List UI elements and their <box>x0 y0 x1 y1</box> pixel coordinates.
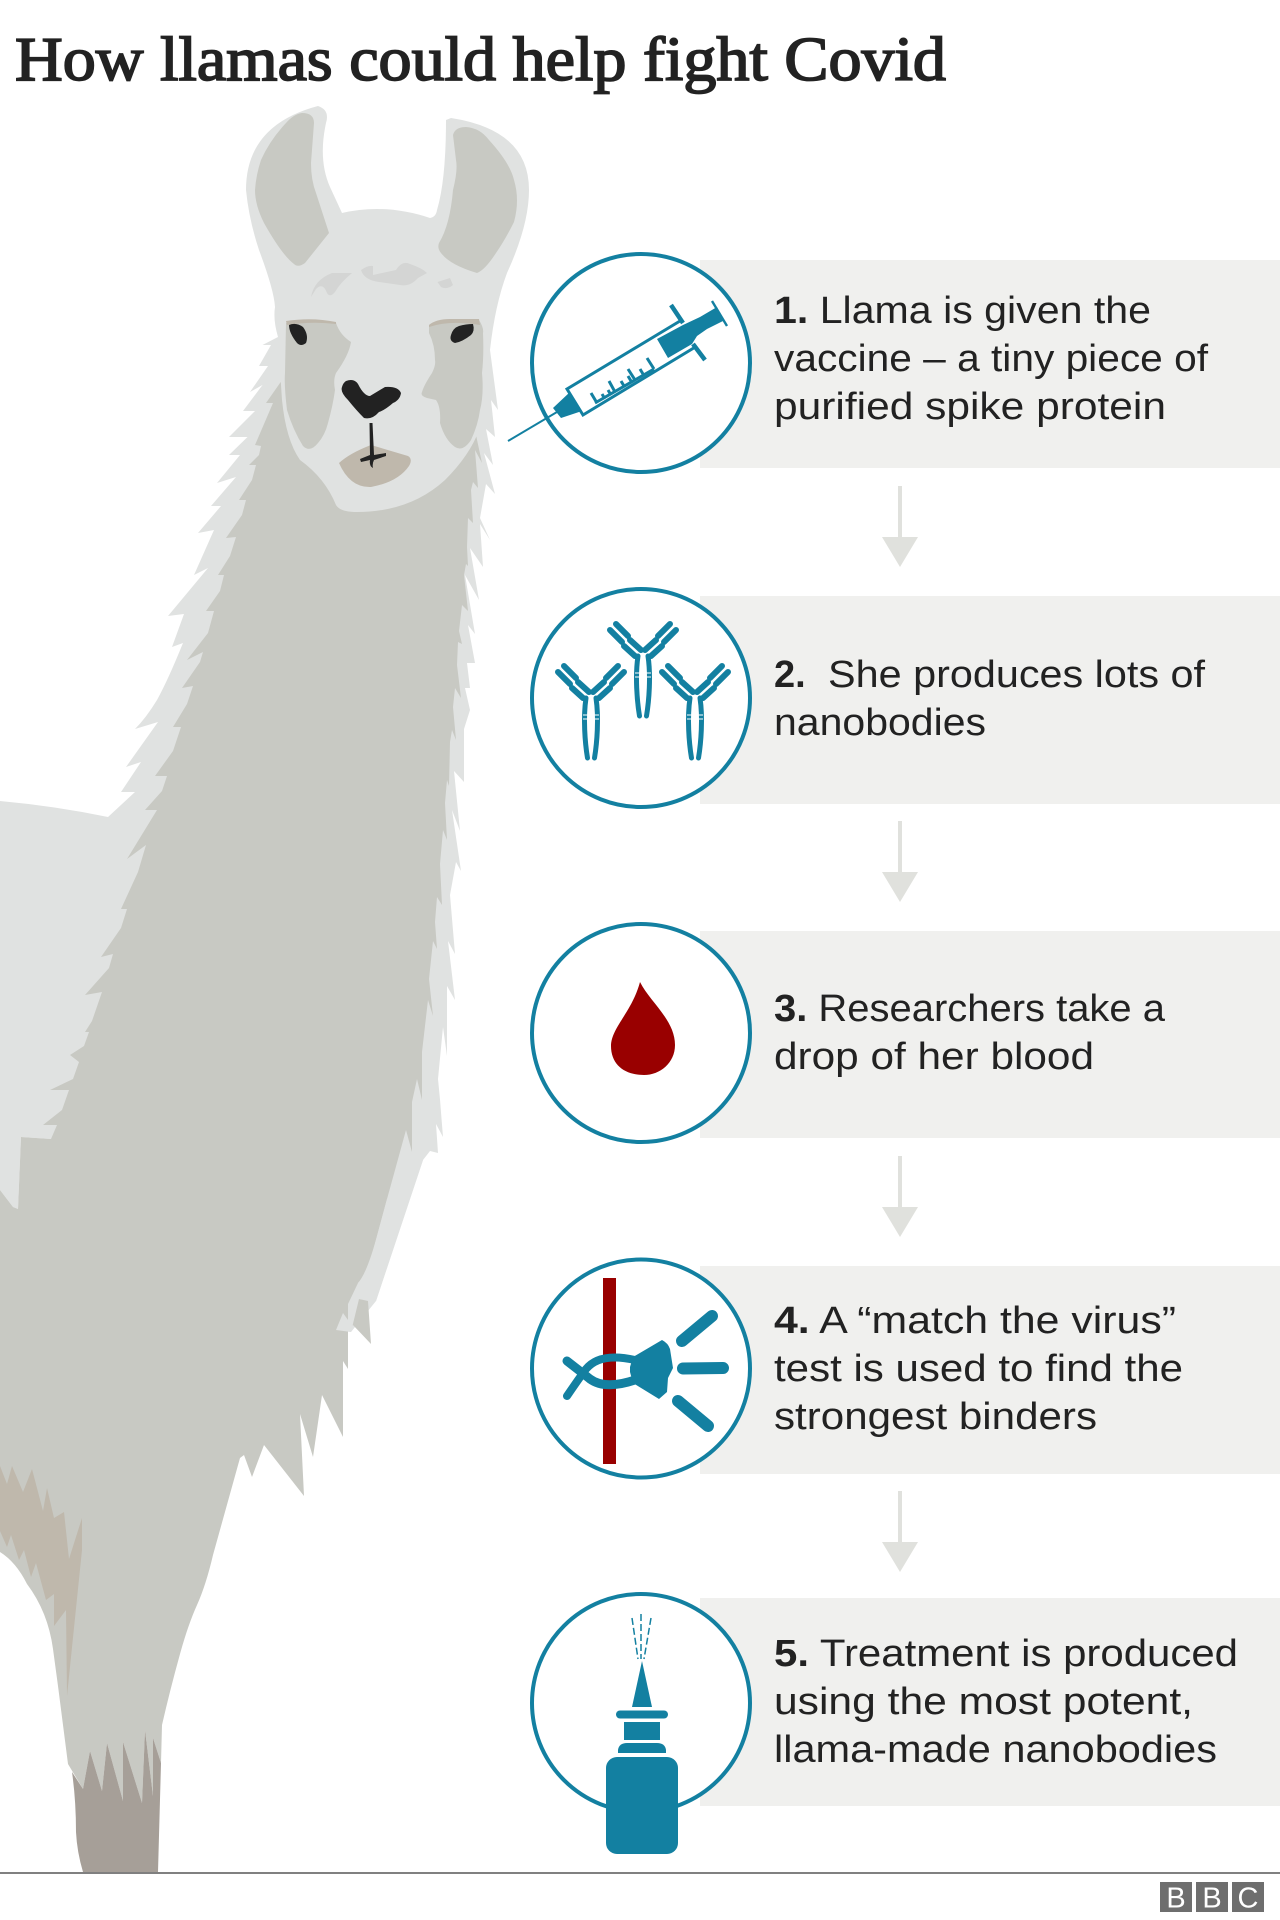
step text <box>774 290 1208 428</box>
title: How llamas could help fight Covid <box>15 26 946 94</box>
step text: drop of her blood <box>774 1036 1094 1078</box>
llama right face patch <box>422 320 483 448</box>
icon: nanobodies <box>558 624 728 758</box>
step text: She produces lots of <box>828 654 1205 696</box>
llama forehead markings <box>311 263 453 297</box>
BBC logo: C <box>1238 1882 1258 1914</box>
icon: blood drop <box>611 982 675 1075</box>
step text: 5. Treatment is produced <box>774 1633 1238 1675</box>
llama right inner ear <box>438 127 517 273</box>
BBC logo <box>1160 1882 1264 1914</box>
step text: nanobodies <box>774 702 986 744</box>
icon circle <box>532 1260 750 1478</box>
arrow 2 to 3 <box>882 821 918 902</box>
step text: vaccine – a tiny piece of <box>774 338 1208 380</box>
llama chest patch <box>0 1466 82 1696</box>
arrow 4 to 5 <box>882 1491 918 1572</box>
llama lip <box>339 445 411 487</box>
footer rule <box>0 1872 1280 1874</box>
icon: syringe <box>508 301 727 441</box>
llama right eye <box>450 324 474 343</box>
icon: nasal spray <box>606 1614 678 1854</box>
nanobody right <box>662 666 728 758</box>
llama mouth <box>360 423 386 468</box>
icon circle <box>532 589 750 807</box>
BBC logo: B <box>1202 1882 1222 1914</box>
step text: test is used to find the <box>774 1348 1183 1390</box>
panel background <box>700 931 1280 1138</box>
llama right brow <box>429 319 480 327</box>
step 5 <box>532 1594 1280 1854</box>
icon: binding test <box>567 1278 723 1464</box>
BBC logo: B <box>1166 1882 1186 1914</box>
step text: 1. Llama is given the <box>774 290 1151 332</box>
llama small fur tuft <box>336 1160 423 1332</box>
arrow 1 to 2 <box>882 486 918 567</box>
icon circle <box>532 924 750 1142</box>
llama left eye <box>289 324 307 345</box>
panel background <box>700 260 1280 468</box>
step text: llama-made nanobodies <box>774 1729 1217 1771</box>
icon circle <box>532 1594 750 1812</box>
step text <box>774 1300 1183 1438</box>
llama hoof <box>72 1730 161 1872</box>
step text: strongest binders <box>774 1396 1097 1438</box>
arrow 3 to 4 <box>882 1156 918 1237</box>
nanobody left <box>558 666 624 758</box>
step 2 <box>532 589 1280 807</box>
llama light fur: body and mane <box>0 337 498 1332</box>
panel background <box>700 1598 1280 1806</box>
step text: using the most potent, <box>774 1681 1193 1723</box>
llama neck and body <box>0 360 482 1803</box>
step text <box>774 1633 1238 1771</box>
step 3 <box>532 924 1280 1142</box>
panel background <box>700 596 1280 804</box>
impact rays <box>678 1316 723 1426</box>
llama left face patch <box>285 320 351 449</box>
llama head <box>246 106 529 512</box>
icon circle <box>532 254 750 472</box>
step text: 4. A “match the virus” <box>774 1300 1176 1342</box>
step text: purified spike protein <box>774 386 1166 428</box>
step 1 <box>508 254 1280 472</box>
step text: 2. <box>774 654 806 696</box>
nanobody top <box>610 624 676 716</box>
llama nose <box>342 380 401 418</box>
red barrier <box>603 1278 616 1464</box>
step 4 <box>532 1260 1280 1478</box>
panel background <box>700 1266 1280 1474</box>
step text <box>774 988 1166 1078</box>
llama left brow <box>286 319 336 325</box>
llama left inner ear <box>255 113 329 266</box>
step text <box>774 654 1205 744</box>
nanobody shape <box>567 1340 673 1399</box>
illustration: llama <box>0 106 529 1872</box>
step text: 3. Researchers take a <box>774 988 1166 1030</box>
